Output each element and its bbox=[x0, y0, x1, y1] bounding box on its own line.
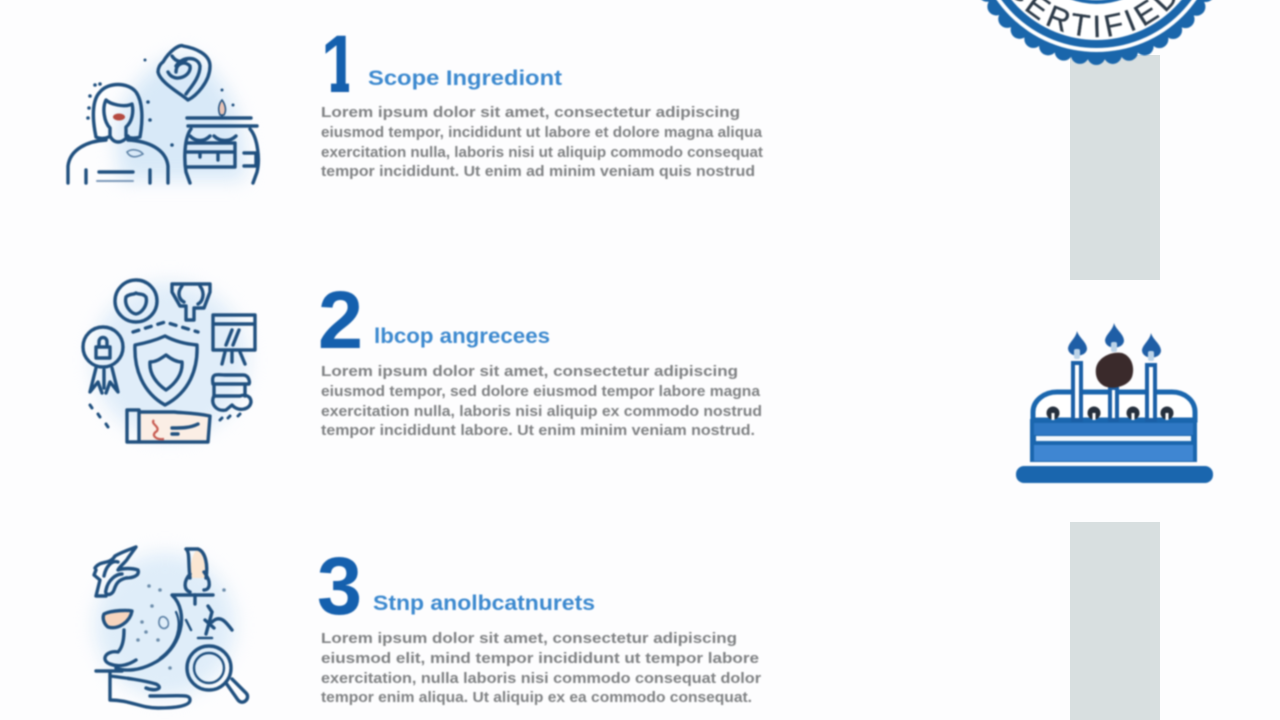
heading 2: lbcop angrecees bbox=[374, 325, 550, 348]
body text 3: Lorem ipsum dolor sit amet, consectetur adipiscing bbox=[321, 630, 737, 647]
step 1 row bbox=[68, 19, 763, 183]
body text 2: exercitation nulla, laboris nisi aliquip ex commodo nostrud bbox=[321, 403, 762, 420]
icon: birthday cake bbox=[1016, 323, 1213, 483]
candles bbox=[1068, 323, 1161, 420]
heading 3: Stnp anolbcatnurets bbox=[373, 592, 595, 615]
body text 3 bbox=[321, 630, 761, 706]
icon: globe with hand and magnifier bbox=[94, 547, 248, 708]
certified seal bbox=[980, 0, 1213, 66]
body text 1: eiusmod tempor, incididunt ut labore et dolore magna aliqua bbox=[321, 124, 763, 141]
number 2: 2 bbox=[318, 275, 363, 366]
body text 1: Lorem ipsum dolor sit amet, consectetur adipiscing bbox=[321, 104, 740, 121]
body text 2 bbox=[321, 363, 762, 439]
grey column: lower bbox=[1070, 522, 1160, 720]
icon: shield with badges and hand bbox=[83, 280, 255, 442]
dark ball bbox=[1096, 353, 1133, 388]
cake body bbox=[1030, 392, 1197, 462]
body text 2: Lorem ipsum dolor sit amet, consectetur adipiscing bbox=[321, 363, 738, 380]
body text 1: tempor incididunt. Ut enim ad minim veniam quis nostrud bbox=[321, 163, 755, 180]
icon: person with cake and ingredient bbox=[68, 46, 258, 183]
cake plate bbox=[1016, 466, 1213, 483]
step 3 row bbox=[94, 541, 761, 708]
number 1: 1 bbox=[321, 19, 358, 110]
body text 1: exercitation nulla, laboris nisi ut aliquip commodo consequat bbox=[321, 144, 763, 161]
heading 1: Scope Ingrediont bbox=[368, 67, 562, 90]
body text 3: exercitation, nulla laboris nisi commodo consequat dolor bbox=[321, 670, 761, 687]
step 2 row bbox=[83, 275, 762, 442]
grey column: upper bbox=[1070, 55, 1160, 280]
body text 2: eiusmod tempor, sed dolore eiusmod tempor labore magna bbox=[321, 383, 761, 400]
number 3: 3 bbox=[317, 541, 362, 632]
body text 1 bbox=[321, 104, 763, 180]
body text 3: tempor enim aliqua. Ut aliquip ex ea commodo consequat. bbox=[321, 689, 752, 706]
body text 2: tempor incididunt labore. Ut enim minim veniam nostrud. bbox=[321, 422, 755, 439]
body text 3: eiusmod elit, mind tempor incididunt ut tempor labore bbox=[321, 650, 759, 667]
